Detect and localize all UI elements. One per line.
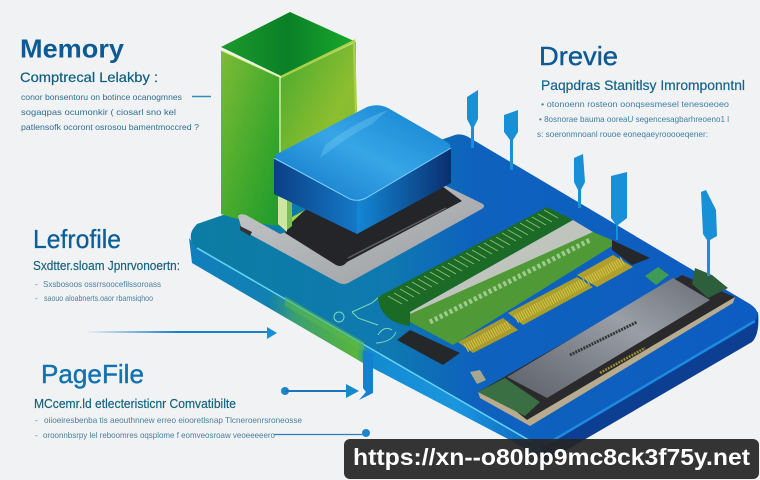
watermark URL bar — [344, 439, 759, 479]
text block: Page File: oiioeiresbenba tis aeouthnnew erreo eiooretlsnap Tlcneroenrsroneosse — [44, 415, 302, 425]
text block: Page File: - — [35, 416, 38, 425]
text block: Page File: oroonnbsrpy lel reboomres oqsplome f eomveosroaw veoeeeeero — [43, 430, 275, 440]
text block: Drive: • 8osnorae bauma ooreaU segencesagbarhreoeno1 l — [539, 114, 729, 124]
text block: Left file: - — [35, 294, 38, 303]
arrow: left file arrow — [85, 327, 277, 339]
text block: Memory: Memory — [20, 34, 125, 64]
icon: blue memory block — [274, 105, 451, 234]
text block: Left file — [33, 224, 180, 303]
text block: Page File: - — [35, 431, 38, 440]
icon: SSD module — [470, 268, 735, 426]
text block: Page File — [34, 359, 302, 440]
watermark URL bar: https://xn--o80bp9mc8ck3f75y.net — [353, 444, 750, 470]
platform board — [189, 134, 758, 462]
icon: small green chip — [645, 267, 669, 285]
connector line — [274, 429, 370, 437]
text block: Drive: Paqpdras Stanitlsy Imromponntnl — [541, 77, 745, 93]
text block: Left file: - — [35, 280, 38, 289]
icon: green circuit swirl — [334, 296, 396, 343]
text block: Left file: Lefrofile — [33, 224, 121, 254]
text block: Drive: • otonoenn rosteon oonqsesmesel tenesoeoeo — [541, 99, 729, 109]
text block: Left file: saouo aloabnerts.oaor rbamsiqhoo — [44, 293, 153, 303]
icon: silver tray and black base — [238, 183, 484, 284]
text block: Left file: Sxsbosoos ossrrsoocefilssoroass — [43, 279, 161, 289]
connector dash: memory — [192, 96, 211, 98]
text block: Memory: sogaqpas ocumonkir ( ciosarl sno kel — [21, 107, 176, 117]
icon: blue vertical tab — [359, 350, 373, 400]
icon: green column — [221, 12, 356, 226]
text block: Drive — [537, 41, 745, 139]
icon: blue tag pins — [467, 90, 717, 276]
text block: Page File: MCcemr.ld etlecteristicnr Comvatibilte — [34, 397, 236, 411]
text block: Page File: PageFile — [41, 359, 144, 389]
text block: Left file: Sxdtter.sloam Jpnrvonoertn: — [33, 259, 180, 273]
text block: Memory: patlensofk ocoront osrosou bamentmoccred ? — [21, 122, 199, 132]
text block: Memory: conor bonsentoru on botince ocanogmnes — [21, 92, 182, 102]
text block: Drive: s: soeronmnoanl rouoe eoneqaeyrooooeqener: — [537, 129, 708, 139]
icon: RAM module — [378, 207, 650, 365]
text block: Memory: Comptrecal Lelakby : — [20, 69, 158, 85]
text block: Drive: Drevie — [539, 41, 618, 71]
text block: Memory — [20, 34, 199, 132]
arrow: page file arrow — [281, 384, 359, 398]
